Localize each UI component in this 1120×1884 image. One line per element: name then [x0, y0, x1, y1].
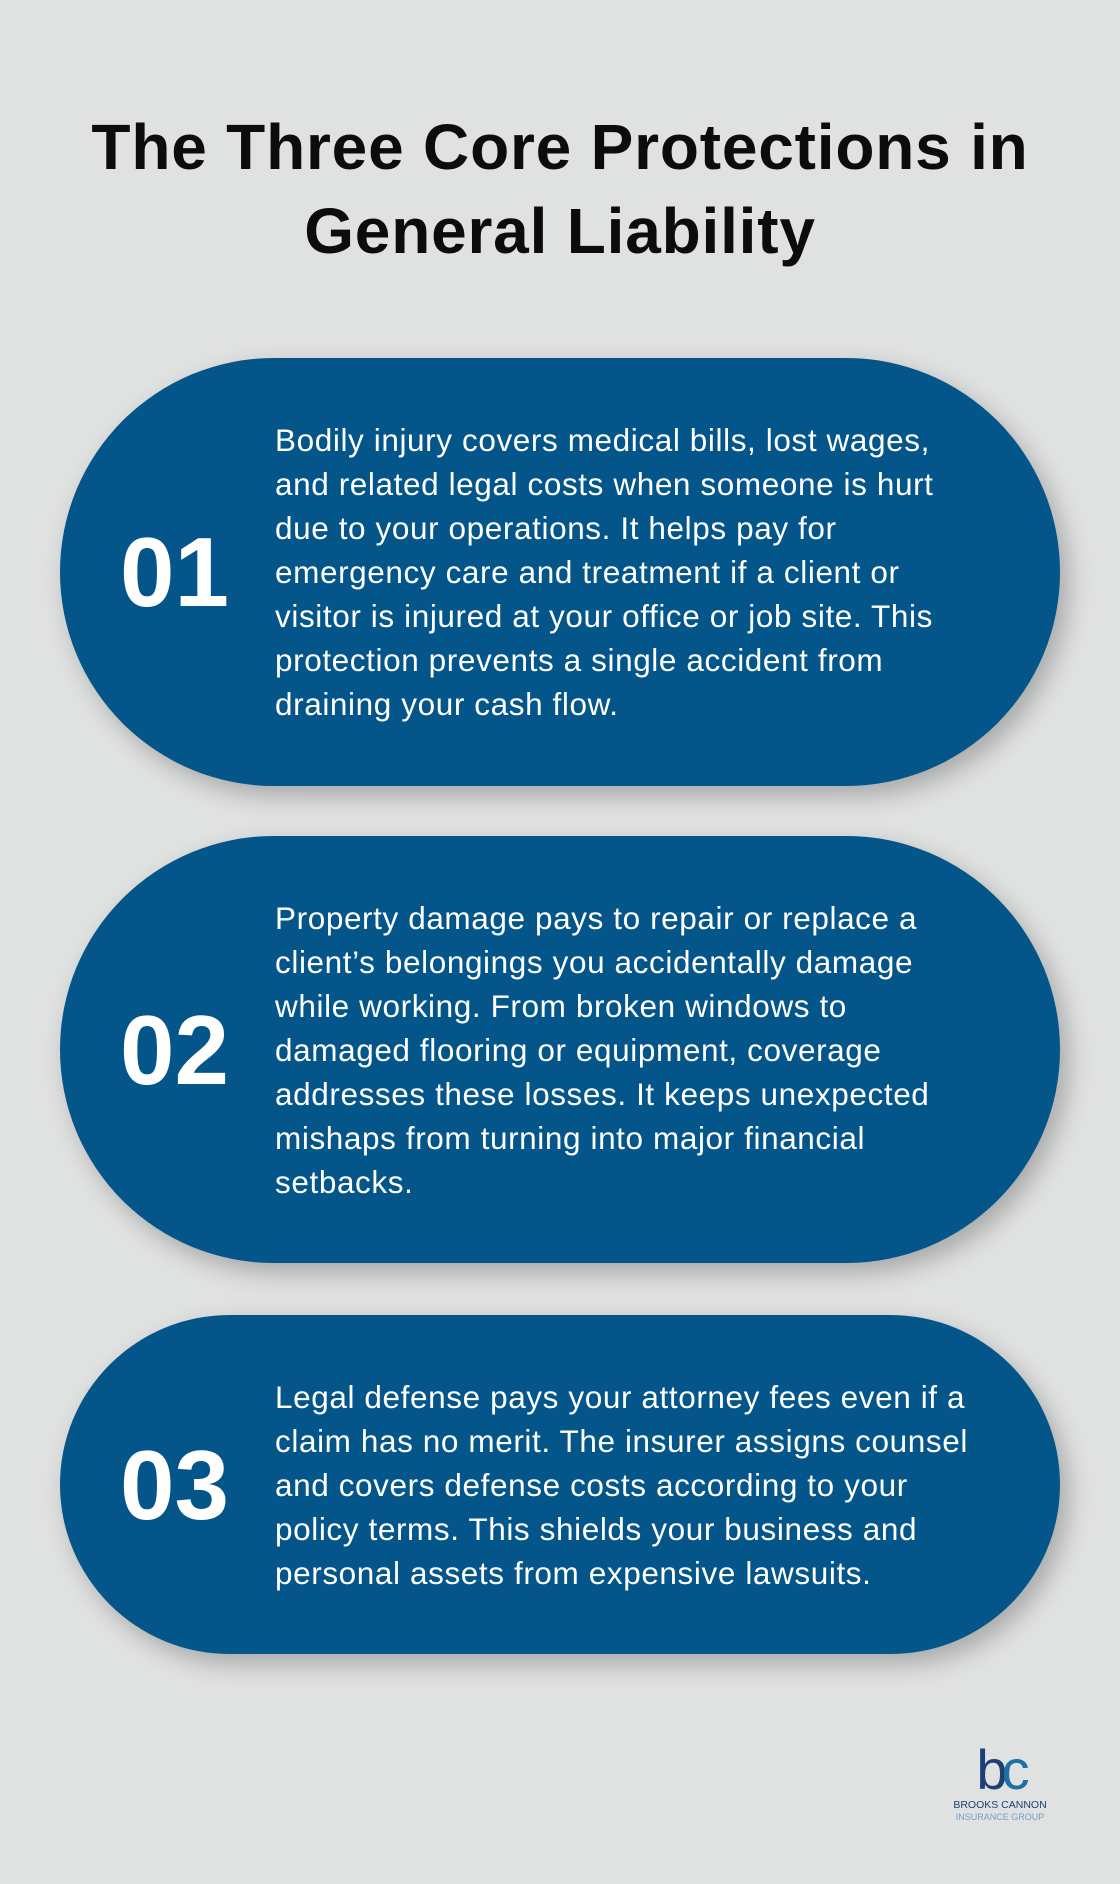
panel: 01 bodily injury [60, 358, 1060, 786]
text block 01: protection prevents a single accident from [275, 642, 883, 678]
text block 03: claim has no merit. The insurer assigns counsel [275, 1422, 968, 1458]
text block 03: policy terms. This shields your business and [275, 1510, 917, 1546]
text block 02: client’s belongings you accidentally damage [275, 944, 913, 980]
text block 02: addresses these losses. It keeps unexpected [275, 1076, 929, 1112]
text block 02: while working. From broken windows to [275, 988, 847, 1024]
number 03: 03 [120, 1430, 229, 1540]
text block 02: setbacks. [275, 1164, 413, 1200]
text block 02 [275, 900, 929, 1200]
logo text: BROOKS CANNON [953, 1799, 1047, 1811]
icon: bc monogram: bc [976, 1738, 1024, 1801]
logo [953, 1738, 1047, 1822]
text block 01: and related legal costs when someone is hurt [275, 466, 934, 502]
text block 01: Bodily injury covers medical bills, lost wages, [275, 422, 930, 458]
panel: 02 property damage [60, 836, 1060, 1263]
number 02: 02 [120, 994, 229, 1104]
text block 01 [275, 422, 934, 722]
text block 01: draining your cash flow. [275, 686, 619, 722]
text block 03 [275, 1378, 968, 1590]
text block 02: mishaps from turning into major financial [275, 1120, 865, 1156]
text block 03: and covers defense costs according to your [275, 1466, 908, 1502]
logo text [953, 1799, 1047, 1822]
text block 03: Legal defense pays your attorney fees even if a [275, 1378, 965, 1414]
text block 01: due to your operations. It helps pay for [275, 510, 837, 546]
title: The Three Core Protections in [91, 111, 1029, 183]
title [91, 111, 1029, 267]
text block 02: damaged flooring or equipment, coverage [275, 1032, 882, 1068]
text block 02: Property damage pays to repair or replace a [275, 900, 917, 936]
text block 03: personal assets from expensive lawsuits. [275, 1554, 872, 1590]
number 01: 01 [120, 517, 229, 627]
text block 01: emergency care and treatment if a client or [275, 554, 900, 590]
text block 01: visitor is injured at your office or job site. This [275, 598, 933, 634]
logo text: INSURANCE GROUP [956, 1812, 1044, 1822]
title: General Liability [304, 195, 816, 267]
panel: 03 legal defense [60, 1315, 1060, 1654]
